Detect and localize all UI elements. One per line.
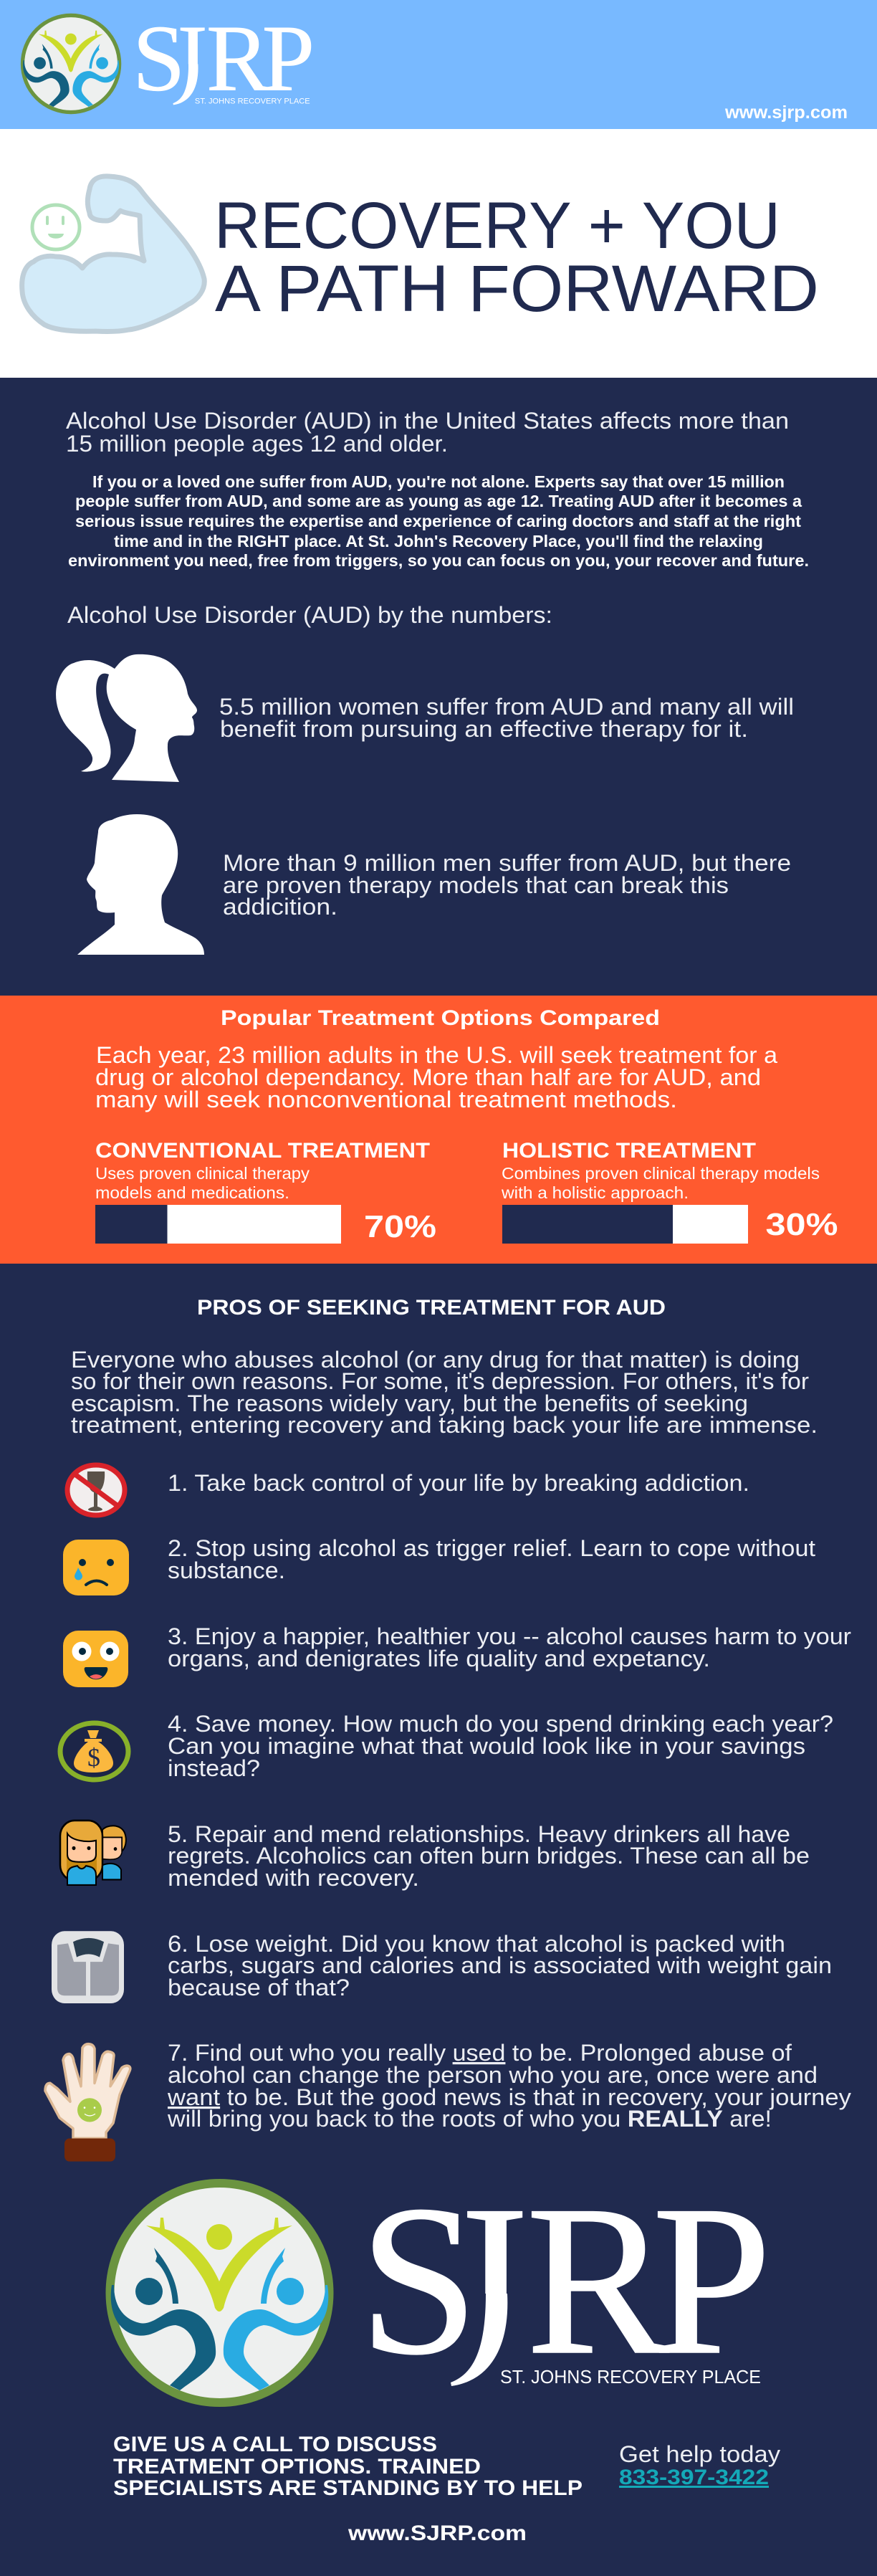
item 5 text xyxy=(168,1821,810,1891)
stat: women: benefit from pursuing an effective therapy for it. xyxy=(220,716,748,742)
comparison: conventional treatment: Uses proven clinical therapy xyxy=(95,1164,310,1183)
bold intro paragraph: environment you need, free from triggers, so you can focus on you, your recover and future. xyxy=(68,551,809,570)
item 3: health xyxy=(63,1623,851,1687)
treatment intro text: Each year, 23 million adults in the U.S. will seek treatment for a xyxy=(96,1042,777,1068)
item 7 text: alcohol can change the person who you are, once were and xyxy=(168,2062,818,2088)
contact phone block: 833-397-3422 xyxy=(619,2466,769,2489)
item 5 text: 5. Repair and mend relationships. Heavy drinkers all have xyxy=(168,1821,790,1847)
stat: men: are proven therapy models that can break this xyxy=(223,872,729,898)
logo: SJRP header lockup: ST. JOHNS RECOVERY PLACE xyxy=(195,97,310,106)
icon: couple xyxy=(60,1821,126,1885)
item 5: relationships xyxy=(60,1821,810,1891)
comparison: conventional treatment xyxy=(95,1139,436,1244)
treatment intro text: many will seek nonconventional treatment methods. xyxy=(95,1087,677,1112)
item 2: coping xyxy=(63,1535,815,1595)
item 7 text: want to be. But the good news is that in recovery, your journey xyxy=(167,2084,851,2110)
heading: pros of seeking treatment: PROS OF SEEKING TREATMENT FOR AUD xyxy=(197,1296,666,1320)
contact phone block: Get help today xyxy=(619,2441,780,2467)
icon: bathroom scale xyxy=(52,1931,124,2003)
item 7 text: 7. Find out who you really used to be. Prolonged abuse of xyxy=(168,2040,792,2066)
item 2 text: 2. Stop using alcohol as trigger relief. Learn to cope without xyxy=(168,1535,815,1561)
bold intro paragraph: time and in the RIGHT place. At St. John's Recovery Place, you'll find the relaxing xyxy=(114,532,763,550)
intro statement xyxy=(66,408,789,457)
item 7 text: will bring you back to the roots of who you REALLY are! xyxy=(167,2106,772,2132)
icon: man silhouette xyxy=(77,814,204,955)
logo: SJRP header lockup: JRP xyxy=(170,6,315,111)
item 3 text: organs, and denigrates life quality and expetancy. xyxy=(168,1646,710,1671)
item 4 text: instead? xyxy=(168,1755,260,1781)
bar: holistic xyxy=(502,1205,748,1244)
comparison: holistic treatment xyxy=(501,1139,838,1244)
intro statement: Alcohol Use Disorder (AUD) in the United States affects more than xyxy=(66,408,789,434)
logo: SJRP footer lockup xyxy=(110,2161,772,2403)
contact phone block xyxy=(619,2441,780,2489)
title: RECOVERY + YOU xyxy=(214,189,780,262)
item 2 text xyxy=(168,1535,815,1583)
panel: treatment options compared xyxy=(0,996,877,1264)
panel: title band xyxy=(0,129,877,378)
stat: women xyxy=(219,694,794,742)
logo: SJRP header lockup xyxy=(22,6,315,113)
logo: SJRP footer lockup: JRP xyxy=(443,2161,772,2399)
website link: www.sjrp.com xyxy=(724,102,848,123)
logo: SJRP footer lockup: S xyxy=(359,2161,479,2399)
treatment intro text xyxy=(95,1042,777,1112)
panel: pros of seeking treatment xyxy=(44,1299,851,2540)
call to action xyxy=(113,2433,583,2500)
item 1 text: 1. Take back control of your life by breaking addiction. xyxy=(168,1470,749,1496)
pros intro paragraph: treatment, entering recovery and taking back your life are immense. xyxy=(71,1412,818,1438)
comparison: holistic treatment: Combines proven clinical therapy models xyxy=(502,1164,820,1183)
bar: conventional xyxy=(95,1205,341,1244)
pros intro paragraph xyxy=(71,1347,818,1438)
item 6 text xyxy=(168,1931,832,2000)
title xyxy=(214,189,819,325)
bold intro paragraph xyxy=(68,472,809,570)
item 6 text: 6. Lose weight. Did you know that alcohol is packed with xyxy=(168,1931,785,1957)
value: 70%: 70% xyxy=(364,1209,436,1244)
heading: popular treatment options: Popular Treatment Options Compared xyxy=(221,1006,660,1030)
bold intro paragraph: serious issue requires the expertise and experience of caring doctors and staff at the right xyxy=(75,512,801,530)
bold intro paragraph: people suffer from AUD, and some are as young as age 12. Treating AUD after it becomes a xyxy=(75,492,802,510)
bold intro paragraph: If you or a loved one suffer from AUD, you're not alone. Experts say that over 15 million xyxy=(92,472,785,491)
icon: flexed arm with smiley xyxy=(22,176,204,332)
item 6: weight xyxy=(52,1931,832,2003)
item 6 text: carbs, sugars and calories and is associated with weight gain xyxy=(168,1952,832,1978)
comparison: conventional treatment: models and medications. xyxy=(95,1183,289,1202)
comparison: holistic treatment: HOLISTIC TREATMENT xyxy=(502,1139,756,1163)
icon: crying face xyxy=(63,1540,129,1595)
call to action: SPECIALISTS ARE STANDING BY TO HELP xyxy=(113,2476,583,2500)
title: A PATH FORWARD xyxy=(215,252,819,325)
item 4 text xyxy=(168,1711,833,1781)
item 4 text: Can you imagine what that would look like in your savings xyxy=(168,1733,805,1759)
logo: SJRP footer lockup: ST. JOHNS RECOVERY PLACE xyxy=(500,2366,761,2387)
panel: header banner xyxy=(0,0,877,129)
item 1: no alcohol xyxy=(67,1465,749,1515)
item 7: identity xyxy=(45,2040,851,2162)
item 4: money xyxy=(60,1711,833,1781)
value: 30%: 30% xyxy=(765,1207,838,1242)
pros intro paragraph: escapism. The reasons widely vary, but the benefits of seeking xyxy=(71,1390,748,1416)
icon: shocked face xyxy=(63,1631,128,1687)
item 6 text: because of that? xyxy=(168,1975,350,2000)
item 5 text: mended with recovery. xyxy=(168,1865,419,1891)
panel: intro and statistics xyxy=(0,378,877,996)
stat: women: 5.5 million women suffer from AUD and many all will xyxy=(219,694,794,720)
intro statement: 15 million people ages 12 and older. xyxy=(66,431,448,457)
stat: men: addicition. xyxy=(223,894,337,920)
comparison: conventional treatment: CONVENTIONAL TREATMENT xyxy=(95,1139,430,1163)
item 2 text: substance. xyxy=(168,1557,285,1583)
item 4 text: 4. Save money. How much do you spend drinking each year? xyxy=(168,1711,833,1737)
call to action: GIVE US A CALL TO DISCUSS xyxy=(113,2433,437,2456)
item 3 text: 3. Enjoy a happier, healthier you -- alcohol causes harm to your xyxy=(168,1623,851,1649)
subheading: by the numbers: Alcohol Use Disorder (AUD) by the numbers: xyxy=(67,602,552,628)
stat: men xyxy=(223,850,791,920)
stat: men: More than 9 million men suffer from AUD, but there xyxy=(223,850,791,876)
treatment intro text: drug or alcohol dependancy. More than half are for AUD, and xyxy=(95,1064,761,1090)
item 3 text xyxy=(168,1623,851,1671)
call to action: TREATMENT OPTIONS. TRAINED xyxy=(113,2455,481,2479)
logo: SJRP header lockup: S xyxy=(133,6,186,111)
pros intro paragraph: so for their own reasons. For some, it's depression. For others, it's for xyxy=(71,1368,809,1394)
comparison: holistic treatment: with a holistic approach. xyxy=(501,1183,689,1202)
icon: woman silhouette xyxy=(56,654,197,782)
icon: money bag: $ xyxy=(87,1743,100,1772)
icon: raised hand with smiley xyxy=(45,2044,130,2162)
icon: no drinking xyxy=(67,1465,125,1515)
pros intro paragraph: Everyone who abuses alcohol (or any drug for that matter) is doing xyxy=(71,1347,800,1373)
item 5 text: regrets. Alcoholics can often burn bridges. These can all be xyxy=(168,1843,810,1869)
website footer: www.SJRP.com xyxy=(348,2522,527,2545)
item 7 text xyxy=(167,2040,851,2132)
icon: money bag xyxy=(60,1723,128,1780)
